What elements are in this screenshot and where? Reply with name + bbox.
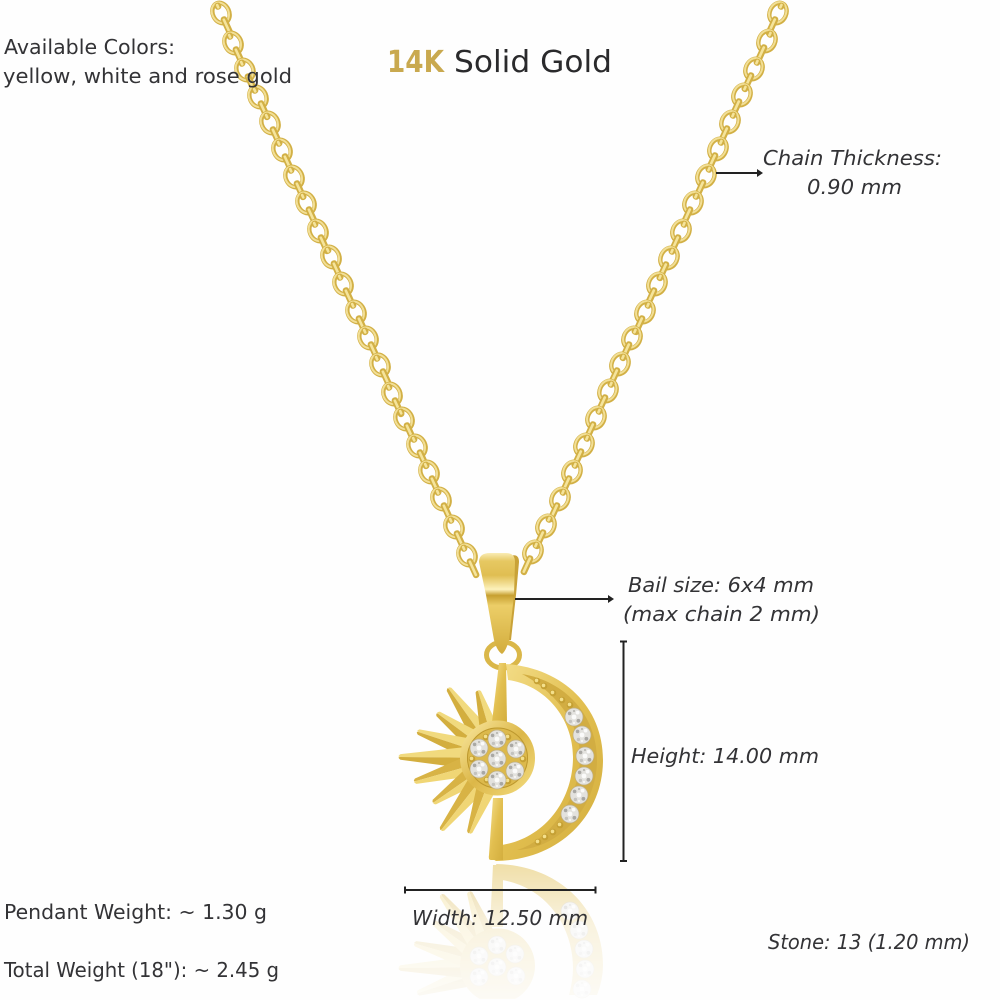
title: Solid Gold — [454, 45, 612, 80]
bail size label: Bail size: 6x4 mm — [628, 573, 814, 597]
pendant weight: Pendant Weight: ~ 1.30 g — [4, 900, 267, 924]
disc stones — [470, 730, 525, 789]
pendant reflection — [398, 864, 603, 1000]
available colors text: Available Colors: — [4, 35, 175, 59]
arrow: bail size — [515, 595, 614, 603]
height label: Height: 14.00 mm — [631, 744, 819, 768]
chain thickness label — [763, 146, 942, 199]
bail — [479, 553, 519, 654]
jump ring — [486, 642, 520, 668]
title — [387, 45, 612, 80]
sun rays — [398, 680, 510, 838]
vertical bar — [489, 663, 507, 860]
sun disc — [464, 724, 532, 792]
bail size label: (max chain 2 mm) — [623, 602, 820, 626]
arrow: chain thickness — [716, 169, 763, 177]
width label: Width: 12.50 mm — [412, 906, 588, 930]
disc beads — [469, 734, 526, 784]
crescent beads — [534, 678, 573, 845]
available colors text — [3, 35, 292, 88]
right chain — [515, 0, 790, 578]
height dimension line — [620, 640, 627, 862]
chain thickness label: Chain Thickness: — [763, 146, 942, 170]
width dimension line — [404, 886, 596, 894]
chain thickness label: 0.90 mm — [807, 175, 902, 199]
left chain — [208, 0, 485, 581]
pendant — [398, 553, 603, 861]
crescent moon — [491, 664, 603, 861]
total weight: Total Weight (18"): ~ 2.45 g — [3, 958, 279, 982]
stone label: Stone: 13 (1.20 mm) — [768, 930, 970, 954]
bail size label — [623, 573, 820, 626]
title: 14K — [387, 45, 446, 80]
crescent stones — [561, 708, 594, 823]
available colors text: yellow, white and rose gold — [3, 64, 292, 88]
